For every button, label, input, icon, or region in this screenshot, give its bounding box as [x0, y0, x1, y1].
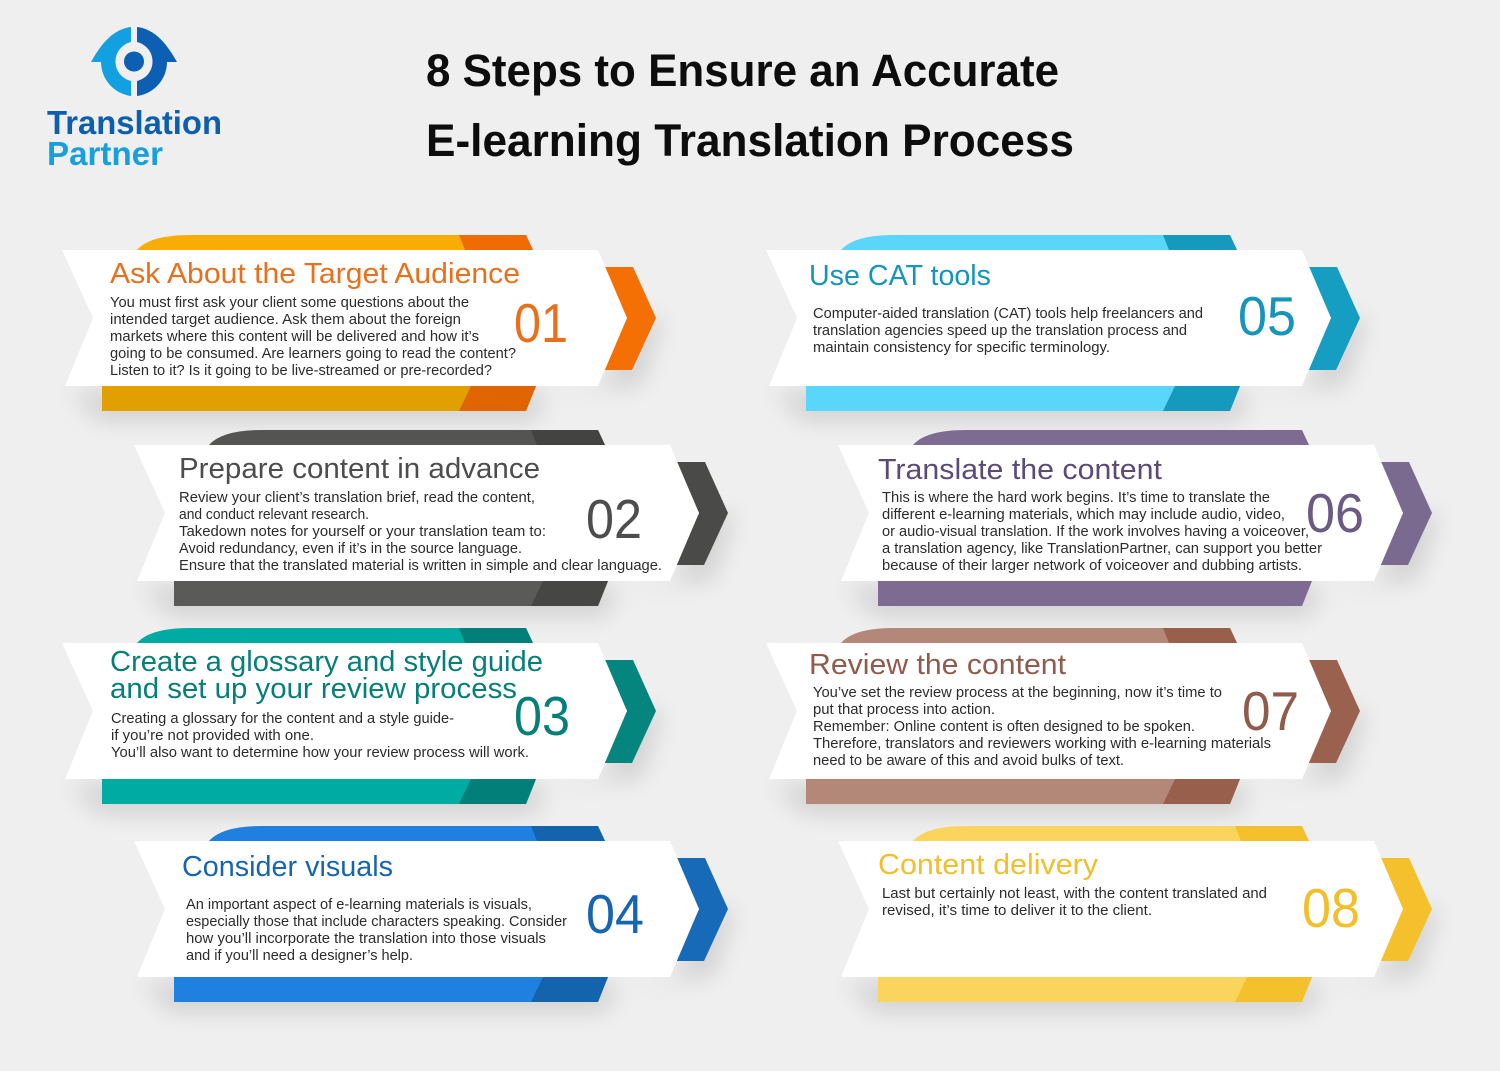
panel: step 06	[838, 430, 1438, 615]
body text: because of their larger network of voiceover and dubbing artists.	[882, 558, 1302, 574]
panel shapes	[838, 430, 1438, 615]
number: 04	[586, 883, 644, 945]
heading	[110, 646, 543, 705]
number: 07	[1242, 680, 1299, 742]
body text: how you’ll incorporate the translation into those visuals	[186, 931, 546, 947]
body text: You’ve set the review process at the beginning, now it’s time to	[813, 685, 1222, 701]
panel: step 08	[838, 826, 1438, 1011]
body text: maintain consistency for specific terminology.	[813, 340, 1110, 356]
title	[426, 45, 1074, 166]
heading: and set up your review process	[110, 673, 517, 705]
body text: Listen to it? Is it going to be live-streamed or pre-recorded?	[110, 363, 492, 379]
heading: Translate the content	[878, 454, 1162, 486]
body text: going to be consumed. Are learners going to read the content?	[110, 346, 516, 362]
number: 05	[1238, 285, 1296, 347]
number: 08	[1302, 877, 1360, 939]
title: E-learning Translation Process	[426, 115, 1074, 166]
heading: Create a glossary and style guide	[110, 646, 543, 678]
panel: step 02	[134, 430, 734, 615]
body text: Ensure that the translated material is written in simple and clear language.	[179, 558, 662, 574]
icon: logo eye left half	[91, 27, 131, 96]
body text: An important aspect of e-learning materials is visuals,	[186, 897, 532, 913]
panel shapes	[766, 235, 1366, 420]
body text: Creating a glossary for the content and a style guide-	[111, 711, 454, 727]
body text	[110, 295, 516, 379]
body text: Remember: Online content is often designed to be spoken.	[813, 719, 1195, 735]
body text: You must first ask your client some questions about the	[110, 295, 469, 311]
panel shapes	[62, 235, 662, 420]
title: 8 Steps to Ensure an Accurate	[426, 45, 1059, 96]
icon: logo pupil	[124, 52, 144, 72]
logo	[47, 27, 222, 172]
panel: step 04	[134, 826, 734, 1011]
logo wordmark: Partner: Partner	[47, 135, 163, 172]
body text: Review your client’s translation brief, read the content,	[179, 490, 535, 506]
body text: a translation agency, like TranslationPartner, can support you better	[882, 541, 1322, 557]
icon: logo eye right half	[137, 27, 177, 96]
panel shapes	[766, 628, 1366, 813]
panel shapes	[134, 430, 734, 615]
body text: put that process into action.	[813, 702, 995, 718]
body text: This is where the hard work begins. It’s time to translate the	[882, 490, 1270, 506]
number: 02	[586, 488, 642, 550]
heading: Ask About the Target Audience	[110, 258, 520, 290]
body text	[813, 685, 1271, 769]
number: 03	[514, 685, 570, 747]
panel: step 03	[62, 628, 662, 813]
body text: need to be aware of this and avoid bulks of text.	[813, 753, 1124, 769]
body text: translation agencies speed up the translation process and	[813, 323, 1187, 339]
body text: intended target audience. Ask them about the foreign	[110, 312, 461, 328]
body text: Avoid redundancy, even if it’s in the source language.	[179, 541, 522, 557]
panel shapes	[838, 826, 1438, 1011]
body text: Computer-aided translation (CAT) tools help freelancers and	[813, 306, 1203, 322]
body text: and if you’ll need a designer’s help.	[186, 948, 413, 964]
heading: Use CAT tools	[809, 260, 991, 292]
body text	[882, 886, 1267, 919]
number: 01	[514, 292, 568, 354]
logo wordmark: Translation: Translation	[47, 104, 222, 141]
body text: different e-learning materials, which may include audio, video,	[882, 507, 1285, 523]
body text	[186, 897, 567, 964]
body text: and conduct relevant research.	[179, 507, 369, 523]
panel: step 05	[766, 235, 1366, 420]
body text: Therefore, translators and reviewers working with e-learning materials	[813, 736, 1271, 752]
body text: revised, it’s time to deliver it to the client.	[882, 903, 1152, 919]
body text: Last but certainly not least, with the content translated and	[882, 886, 1267, 902]
panel shapes	[134, 826, 734, 1011]
panel: step 07	[766, 628, 1366, 813]
heading: Content delivery	[878, 849, 1099, 881]
heading: Review the content	[809, 649, 1066, 681]
body text	[882, 490, 1322, 574]
body text: You’ll also want to determine how your review process will work.	[111, 745, 529, 761]
body text: markets where this content will be delivered and how it’s	[110, 329, 479, 345]
body text	[179, 490, 662, 574]
heading: Consider visuals	[182, 851, 393, 883]
body text	[111, 711, 529, 761]
body text: if you’re not provided with one.	[111, 728, 314, 744]
heading: Prepare content in advance	[179, 453, 540, 485]
body text: especially those that include characters speaking. Consider	[186, 914, 567, 930]
number: 06	[1306, 482, 1364, 544]
panel shapes	[62, 628, 662, 813]
panel: step 01	[62, 235, 662, 420]
body text: or audio-visual translation. If the work involves having a voiceover,	[882, 524, 1309, 540]
body text: Takedown notes for yourself or your translation team to:	[179, 524, 546, 540]
body text	[813, 306, 1203, 356]
